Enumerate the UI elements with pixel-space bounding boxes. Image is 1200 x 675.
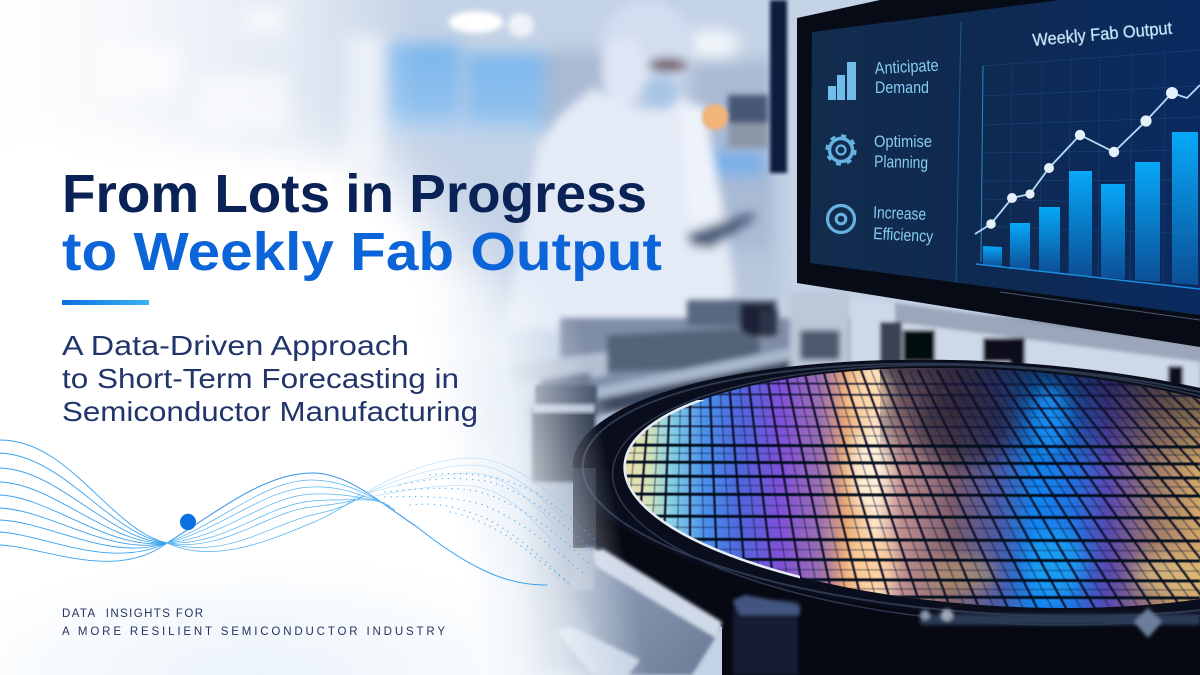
ceiling lights xyxy=(449,11,534,37)
monitor screen xyxy=(810,0,1200,315)
chart and dashboard contents xyxy=(956,22,1200,289)
subtitle xyxy=(62,330,478,427)
footer tagline xyxy=(62,608,445,638)
label: optimise planning xyxy=(874,132,932,172)
lower body highlights xyxy=(733,595,1200,675)
label: increase efficiency: Increase xyxy=(873,203,926,224)
icon: rising bars xyxy=(828,62,856,100)
label: increase efficiency xyxy=(873,203,934,246)
orange indicator light xyxy=(702,104,728,130)
monitor xyxy=(797,0,1200,347)
middle wave bundle xyxy=(167,473,417,552)
monitor rim highlight xyxy=(1000,292,1200,320)
wafer highlights xyxy=(846,371,1200,601)
blurred technician xyxy=(505,1,756,330)
left wave bundle xyxy=(0,440,167,561)
right lower sweep xyxy=(417,527,547,585)
data wave lines xyxy=(0,440,595,585)
label: anticipate demand xyxy=(874,56,939,97)
die grid rows xyxy=(620,445,1200,598)
blurred cleanroom background xyxy=(345,30,780,300)
soft bottom tint xyxy=(0,550,600,675)
label: optimise planning: Optimise xyxy=(874,132,932,151)
wafer holder ring xyxy=(565,336,1200,646)
die grid heavy lines xyxy=(603,370,1200,610)
silicon wafer xyxy=(626,368,1200,608)
silver block left xyxy=(530,385,600,675)
chart title: Weekly Fab Output xyxy=(1032,18,1173,50)
monitor bezel xyxy=(797,0,1200,347)
accent rule xyxy=(62,300,149,305)
silver bracket xyxy=(557,547,722,675)
output bars xyxy=(983,132,1198,285)
wafer bright rim xyxy=(623,400,800,578)
title: From Lots in Progress xyxy=(62,164,647,224)
title xyxy=(62,164,662,282)
wave marker dot xyxy=(180,514,196,530)
label: anticipate demand: Anticipate xyxy=(874,56,939,78)
footer tagline: A MORE RESILIENT SEMICONDUCTOR INDUSTRY xyxy=(62,626,445,638)
white veil core xyxy=(0,140,440,340)
upper right bench plates xyxy=(850,298,1200,420)
subtitle: Semiconductor Manufacturing xyxy=(62,396,478,427)
title: to Weekly Fab Output xyxy=(62,222,662,282)
label: increase efficiency: Efficiency xyxy=(873,224,934,246)
right fan bundle xyxy=(365,458,570,555)
scattered data dots xyxy=(385,474,595,585)
icon: gear xyxy=(827,136,855,164)
tilted white fade lower scene xyxy=(330,293,640,675)
chart x axis xyxy=(976,264,1200,289)
output line series xyxy=(975,85,1200,234)
chart y axis xyxy=(981,66,983,262)
white fade overlay xyxy=(0,0,700,675)
footer tagline: DATA INSIGHTS FOR xyxy=(62,608,203,620)
chart gridlines xyxy=(983,50,1200,285)
die grid thin lines xyxy=(618,370,1200,610)
lower machine body xyxy=(590,470,1200,675)
white veil over upper scene xyxy=(0,135,510,340)
icon: target xyxy=(828,206,854,232)
machinery rails xyxy=(513,292,1200,418)
label: anticipate demand: Demand xyxy=(875,78,929,97)
blurred equipment behind technician xyxy=(728,95,768,148)
subtitle: to Short-Term Forecasting in xyxy=(62,363,459,394)
soft pale blocks top left xyxy=(100,8,288,130)
subtitle: A Data-Driven Approach xyxy=(62,330,409,361)
dark vertical column xyxy=(770,0,787,173)
label: optimise planning: Planning xyxy=(874,152,928,172)
die grid xyxy=(603,370,1200,610)
